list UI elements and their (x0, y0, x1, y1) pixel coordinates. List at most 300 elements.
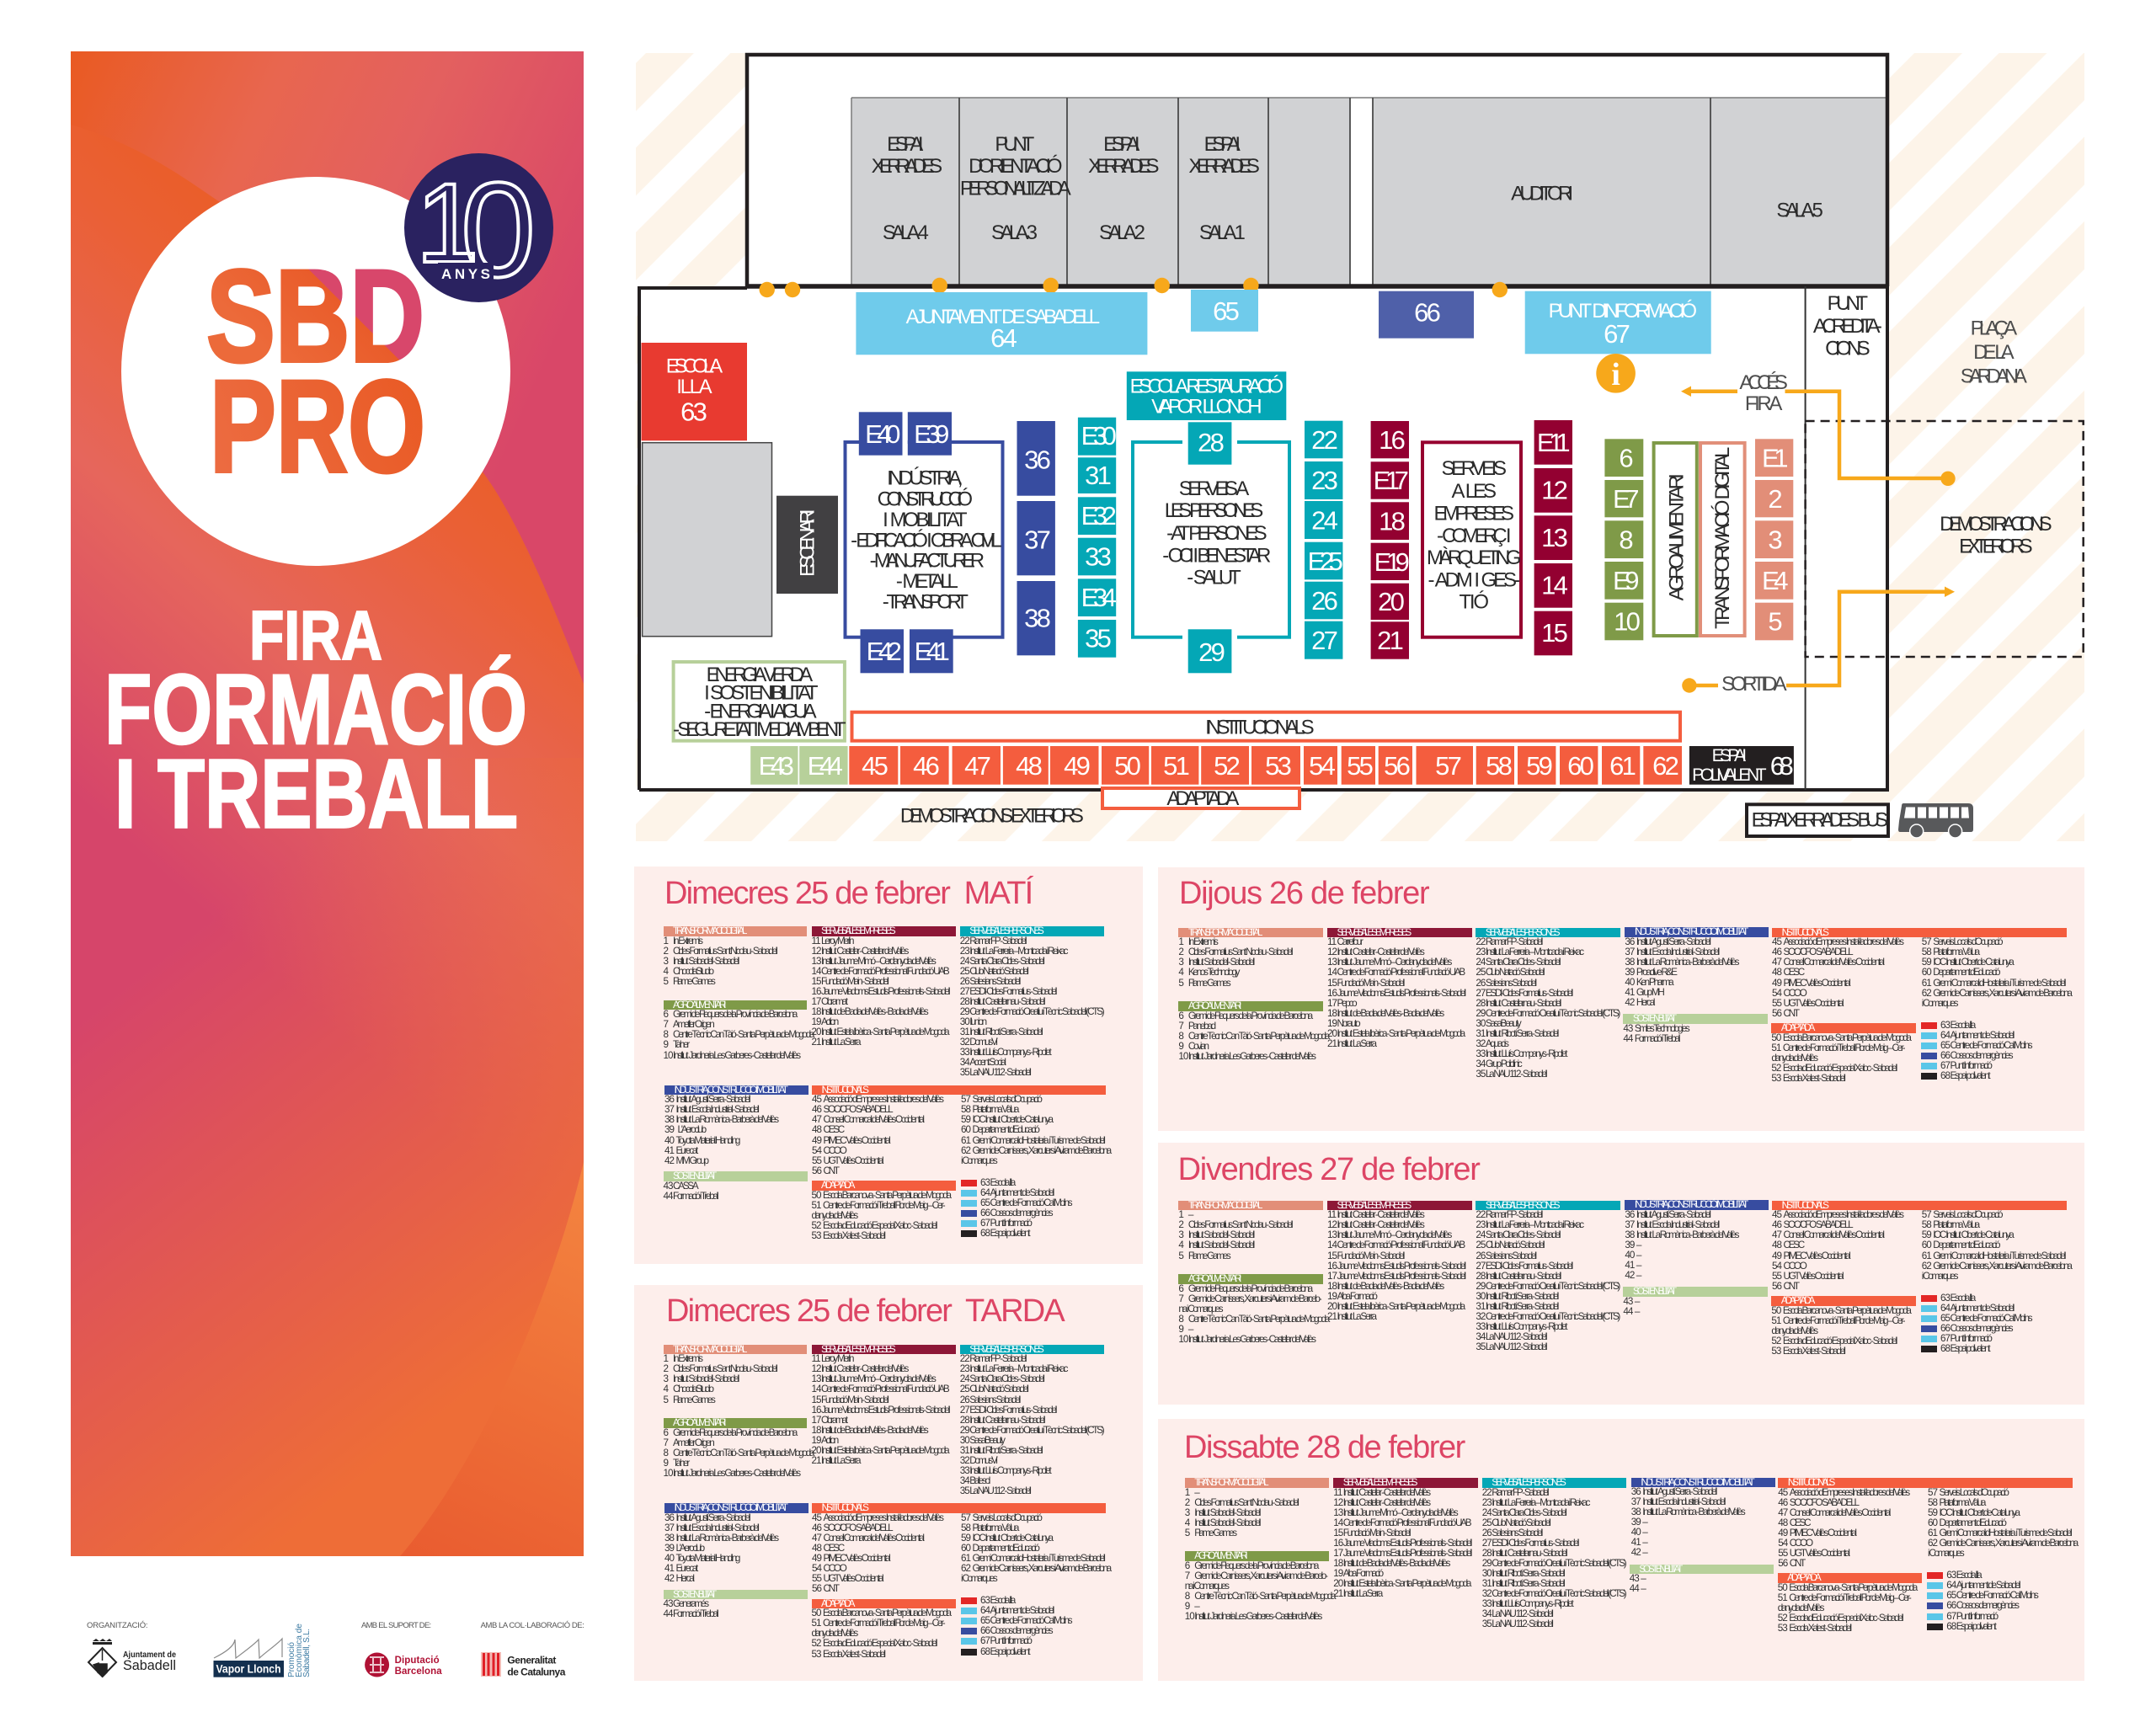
floor plan building outline (639, 53, 1887, 790)
access doors: orange dots (760, 278, 1508, 297)
list: indústria, construcció i mobilitat: Institut Agustí Serra - Sabadell (675, 1512, 749, 1523)
stands E11-15: 15 (1541, 618, 1567, 648)
list: serveis a les persones: Institut Lluís Companys - Ripollet (1486, 1048, 1566, 1059)
list: serveis a les persones: Institut Lluís Companys - Ripollet (969, 1465, 1050, 1476)
list: sostenibilitat: – (1641, 1573, 1644, 1584)
list: serveis a les persones: 27 (1476, 1261, 1485, 1272)
list: agroalimentari: Gremi de Flequers de la Província de Barcelona (1194, 1560, 1317, 1571)
list: indústria, construcció i mobilitat: 37 (1625, 946, 1634, 957)
list: institucionals: CESC (824, 1124, 843, 1135)
list: adaptada: danyola del Vallès (812, 1210, 857, 1221)
list: serveis a les persones: 25 (1476, 967, 1485, 978)
legend: espais: Centre de Formació Cal Molins (1951, 1040, 2031, 1051)
list: adaptada: ADAPTADA (821, 1598, 852, 1609)
legend: espais: Ajuntament de Sabadell (1951, 1303, 2013, 1314)
list: serveis a les empreses (1333, 1477, 1478, 1599)
stands 22-27: 26 (1311, 586, 1337, 616)
list: institucionals: Gremi de Carnissers, Xarcuters i Aviram de Barcelona (1939, 1538, 2077, 1549)
bottom row stands E43-62: E44 (808, 751, 843, 781)
list: adaptada: 51 (1778, 1592, 1787, 1603)
list: indústria, construcció i mobilitat: Institut Agustí Serra - Sabadell (1642, 1486, 1716, 1497)
list: serveis a les persones: Institut La Ferreria – Montcada i Reixac (1486, 1219, 1582, 1230)
list: institucionals: 56 (1772, 1008, 1781, 1019)
zone: serveis a les empreses: A LES (1452, 480, 1496, 503)
logo: generalitat de catalunya (481, 1621, 584, 1677)
list: institucionals: 55 (812, 1573, 821, 1584)
list: agroalimentari: AGROALIMENTARI (1194, 1550, 1245, 1561)
list: transformació digital: Institut Sabadell - Sabadell (1194, 1507, 1259, 1518)
list: serveis a les persones: 27 (960, 986, 969, 997)
legend: espais: 68 (1940, 1070, 1950, 1081)
bottom row stands E43-62: 49 (1064, 751, 1090, 781)
list: serveis a les empreses: Alba Formació (1337, 1291, 1376, 1302)
list: agroalimentari: Centre Tècnic Can Tàió - Santa Perpètua de Mogoda (1188, 1314, 1328, 1325)
list: serveis a les persones: Centre de Formació Creatiu i Tècnic Sabadell (CTS) (969, 1425, 1102, 1436)
list: serveis a les persones: Institut Castellarnau - Sabadell (969, 996, 1043, 1007)
list: transformació digital: 5 (664, 976, 668, 987)
stands E11-15 (1534, 420, 1572, 655)
label: plaça de la sardana: SARDANA (1961, 365, 2027, 387)
list: transformació digital: TRANSFORMACIÓ DIGITAL (673, 1344, 744, 1355)
list: serveis a les persones: Club Natació Sabadell (969, 1384, 1027, 1394)
list: institucionals: 49 (812, 1135, 821, 1146)
list: serveis a les persones: 33 (1476, 1048, 1485, 1059)
list: serveis a les empreses: Jaume Viladoms Estudis Professionals - Sabadell (1337, 1261, 1465, 1272)
list: institucionals: 49 (1772, 1250, 1781, 1261)
zone: indústria, construcció i mobilitat: E40 (865, 419, 900, 449)
list: serveis a les persones: 25 (1476, 1240, 1485, 1250)
list: serveis a les persones (1476, 1200, 1620, 1352)
list: institucionals: Gremi Comarcal d'Hostaleria i Turisme de Sabadell (1933, 1250, 2064, 1261)
zone: energia verda i sostenibilitat: - ENERGIA I AIGUA (704, 700, 817, 723)
list: indústria, construcció i mobilitat: 38 (664, 1114, 674, 1125)
list: transformació digital (1185, 1477, 1329, 1538)
list: indústria, construcció i mobilitat: Grup MH (1636, 987, 1663, 998)
stand 63: escola illa: ESCOLA (666, 355, 723, 377)
list: serveis a les empreses: 14 (812, 966, 821, 977)
list: agroalimentari: Institut Jardineria Les Garberes - Castellar del Vallès (1188, 1334, 1315, 1345)
list: serveis a les persones: 25 (960, 1384, 969, 1394)
list: adaptada: Escola Barcanova - Santa Perpètua de Mogoda (823, 1190, 950, 1201)
stand 68: espai polivalent (1689, 746, 1794, 785)
list: indústria, construcció i mobilitat: 36 (664, 1512, 674, 1523)
list: serveis a les empreses: 12 (812, 946, 821, 957)
list: institucionals: Serveis Locals d'Ocupació (1933, 1209, 2001, 1220)
list: serveis a les persones: 24 (960, 956, 969, 967)
badge: 10 anys: 1 (416, 161, 479, 286)
panel: dissabte 28 de febrer (1158, 1419, 2084, 1681)
legend: espais (961, 1595, 1073, 1657)
list: institucionals: 60 (1922, 967, 1931, 978)
list: serveis a les persones: Institut Ribot i Serra - Sabadell (1492, 1578, 1563, 1589)
list: indústria, construcció i mobilitat: Toyota Material Handling (675, 1553, 739, 1564)
dashed zone: demostracions exteriors (1806, 421, 2084, 657)
list: indústria, construcció i mobilitat: Hercal (675, 1573, 693, 1584)
list: institucionals: 62 (961, 1145, 970, 1156)
list: transformació digital: Institut Sabadell - Sabadell (1188, 957, 1253, 968)
stands E1-5 transformació digital: E4 (1762, 566, 1788, 595)
zone: indústria, construcció i mobilitat: INDÚSTRIA, (887, 467, 962, 490)
legend: espais: Espai polivalent (1951, 1343, 1988, 1354)
list: indústria, construcció i mobilitat: Institut Escola Industrial - Sabadell (675, 1522, 758, 1533)
list: serveis a les empreses: 18 (1327, 1008, 1337, 1019)
zone: serveis a les persones: - AT PERSONES (1166, 522, 1267, 545)
list: institucionals: 59 (1928, 1507, 1937, 1518)
arrow: sortida (1682, 586, 1955, 696)
legend: espais: Cossos d'emergències (1956, 1600, 2018, 1611)
list: institucionals: Gremi Comarcal d'Hostaleria i Turisme de Sabadell (972, 1135, 1104, 1146)
stands 16-21: 16 (1379, 425, 1405, 455)
list: agroalimentari: 8 (664, 1029, 668, 1040)
list: sostenibilitat: SOSTENIBILITAT (1633, 1013, 1674, 1024)
heading: fira formació i treball: FIRA (249, 596, 382, 675)
list: institucionals: 45 (812, 1094, 821, 1105)
list: adaptada: ADAPTADA (1781, 1295, 1812, 1306)
list: institucionals: Plataforma Vàlua (972, 1522, 1017, 1533)
list: serveis a les empreses: Pepco (1337, 998, 1355, 1009)
list: serveis a les empreses: Institut Castellar - Castellar del Vallès (1337, 946, 1423, 957)
list: transformació digital: ChocolaStudio (673, 966, 712, 977)
list: indústria, construcció i mobilitat: 40 (664, 1553, 674, 1564)
list: serveis a les persones: 31 (1476, 1028, 1485, 1039)
stand 68: espai polivalent: 68 (1770, 751, 1792, 781)
list: indústria, construcció i mobilitat: 37 (1625, 1219, 1634, 1230)
stage: escenari (776, 496, 838, 594)
legend: espais: 64 (980, 1187, 990, 1198)
rooms: sales labels: AUDITORI (1511, 182, 1572, 205)
list: sostenibilitat: 44 (664, 1191, 673, 1202)
list: serveis a les empreses: 17 (1333, 1548, 1342, 1559)
list: serveis a les persones: 27 (1476, 988, 1485, 999)
zone: serveis a les empreses (1422, 442, 1521, 637)
list: serveis a les persones: 35 (1476, 1069, 1485, 1080)
list: serveis a les persones: Institut La Ferreria – Montcada i Reixac (969, 946, 1066, 957)
list: sostenibilitat: – (1635, 1296, 1638, 1307)
list: institucionals: 55 (1772, 998, 1781, 1009)
stands 36-38: 37 (1024, 525, 1050, 555)
list: sostenibilitat: 43 (1623, 1296, 1632, 1307)
list: serveis a les persones: 25 (960, 966, 969, 977)
list: serveis a les empreses: SERVEIS A LES EMPRESES (1343, 1477, 1415, 1488)
list: sostenibilitat: Smiles Technologies (1635, 1023, 1688, 1034)
list: indústria, construcció i mobilitat: INDÚSTRIA, CONSTRUCCIÓ I MOBILITAT (1635, 1199, 1747, 1210)
list: institucionals: 47 (1772, 1229, 1781, 1240)
list: transformació digital: 3 (1185, 1507, 1189, 1518)
list: institucionals (1778, 1478, 2073, 1569)
list: institucionals: 61 (1928, 1528, 1937, 1538)
list: institucionals: CCOO (1784, 988, 1806, 999)
stands E11-15: 12 (1541, 475, 1567, 505)
list: institucionals: PIMEC Vallès Occidental (824, 1135, 889, 1146)
list: transformació digital: 1 (1178, 936, 1183, 947)
list: indústria, construcció i mobilitat: L'Aeroclub (677, 1124, 705, 1135)
list: serveis a les persones: Institut Ribot i Serra - Sabadell (969, 1445, 1041, 1456)
legend: espais: 64 (1940, 1303, 1950, 1314)
list: indústria, construcció i mobilitat: 39 (664, 1543, 674, 1554)
list: institucionals: 57 (1928, 1487, 1937, 1498)
list: agroalimentari: 9 (664, 1039, 668, 1050)
list: transformació digital: Flame Games (1188, 978, 1230, 989)
zone: indústria, construcció i mobilitat (846, 412, 1002, 673)
list: institucionals: Plataforma Vàlua (972, 1104, 1017, 1115)
legend: espais: Escola Illa (1951, 1293, 1974, 1304)
list: serveis a les empreses: 21 (1333, 1588, 1342, 1599)
list: institucionals: 57 (1922, 1209, 1931, 1220)
list: institucionals: 62 (1922, 988, 1931, 999)
list: indústria, construcció i mobilitat: 40 (1625, 977, 1634, 988)
stands 22-27: E25 (1308, 547, 1342, 576)
list: serveis a les empreses: 19 (812, 1016, 821, 1027)
list: institucionals: 47 (812, 1533, 821, 1544)
stand 63: escola illa: ILLA (676, 376, 712, 398)
legend: espais: Cossos d'emergències (990, 1208, 1051, 1218)
stands E1-5 transformació digital: 5 (1768, 606, 1781, 637)
legend: espais: 65 (980, 1615, 990, 1626)
bottom row stands E43-62: 54 (1309, 751, 1336, 781)
list: serveis a les empreses: Institut de Badia del Vallès - Badia del Vallès (1343, 1558, 1449, 1569)
zone: serveis a les empreses: SERVEIS (1442, 457, 1506, 480)
list: transformació digital (664, 925, 807, 987)
label: punt acreditacions (1813, 292, 1881, 360)
zone: transformació digital: TRANSFORMACIÓ DIGITAL (1711, 447, 1734, 629)
list: adaptada: Centre de Formació i Treball Flor de Maig – Cer- (1783, 1042, 1903, 1053)
list: transformació digital: Cicles Formatius Sant Nicolau - Sabadell (1194, 1497, 1298, 1508)
list: institucionals: Serveis Locals d'Ocupació (972, 1094, 1041, 1105)
stand 63: escola illa: 63 (680, 397, 707, 427)
list: serveis a les empreses: 15 (812, 1394, 821, 1405)
list: indústria, construcció i mobilitat: – (1636, 1260, 1640, 1271)
list: serveis a les persones (960, 925, 1104, 1078)
list: indústria, construcció i mobilitat: 38 (1625, 1229, 1634, 1240)
list: serveis a les persones: Salesians Sabadell (1486, 978, 1535, 989)
list: serveis a les empreses: Obramat (821, 996, 846, 1007)
list: serveis a les persones: 30 (960, 1016, 969, 1027)
list: agroalimentari: 9 (1178, 1041, 1183, 1052)
list: institucionals: 46 (1772, 946, 1781, 957)
logos: organització: Ajuntament de (123, 1650, 176, 1660)
list: sostenibilitat: SOSTENIBILITAT (673, 1170, 714, 1181)
legend: espais: Punt Informació (1951, 1333, 1991, 1344)
list: agroalimentari: Gremi de Carnissers, Xarcuters i Aviram de Barcelo- (1194, 1570, 1326, 1581)
legend: espais: Cossos d'emergències (1951, 1050, 2011, 1061)
list: indústria, construcció i mobilitat: 38 (1625, 957, 1634, 968)
list: serveis a les persones: DomusVi (969, 1037, 996, 1048)
list: serveis a les empreses: 13 (1327, 1229, 1337, 1240)
list: agroalimentari: Taher (673, 1458, 688, 1469)
list: sostenibilitat: SOSTENIBILITAT (673, 1589, 714, 1600)
legend: espais: 67 (980, 1218, 990, 1229)
list: serveis a les persones: 30 (960, 1435, 969, 1446)
list: serveis a les empreses: 12 (1333, 1497, 1342, 1508)
list: institucionals: 48 (812, 1124, 821, 1135)
list: institucionals: SOC/CFO SABADELL (824, 1104, 891, 1115)
list: serveis a les empreses: Centre de Formació Professional Fundació UAB (821, 966, 947, 977)
list: serveis a les empreses: 14 (1327, 1240, 1337, 1250)
list: serveis a les empreses: 13 (1327, 957, 1337, 968)
list: serveis a les empreses: Centre de Formació Professional Fundació UAB (1343, 1517, 1470, 1528)
list: transformació digital: 3 (664, 1373, 668, 1384)
list: institucionals: 61 (1922, 1250, 1931, 1261)
list: adaptada: Escola Xalest - Sabadell (823, 1230, 884, 1241)
list: adaptada: 51 (812, 1200, 821, 1211)
list: serveis a les persones: ESDI-Cicles Formatius - Sabadell (969, 1405, 1055, 1416)
list: adaptada: Escola d'Educació Especial Xaloc - Sabadell (1789, 1613, 1902, 1624)
list: serveis a les empreses: 20 (1327, 1028, 1337, 1039)
list: serveis a les empreses (1327, 1200, 1472, 1322)
list: adaptada: 50 (1778, 1582, 1787, 1593)
list: institucionals: 55 (1772, 1271, 1781, 1282)
list: agroalimentari: 7 (664, 1437, 668, 1448)
heading: fira formació i treball: I TREBALL (115, 739, 518, 849)
list: adaptada: 51 (1771, 1315, 1780, 1326)
list: institucionals: 58 (1928, 1497, 1937, 1508)
list: transformació digital: Institut Sabadell - Sabadell (673, 1373, 738, 1384)
list: transformació digital: ChocolaStudio (673, 1384, 712, 1394)
list: serveis a les persones: Ramar FP - Sabadell (969, 936, 1025, 946)
label: plaça de la sardana: DE LA (1973, 341, 2015, 364)
list: indústria, construcció i mobilitat: Ken Pharma (1636, 977, 1672, 988)
list: serveis a les persones: 26 (960, 1394, 969, 1405)
bottom row stands E43-62: 59 (1526, 751, 1552, 781)
logo: diputació barcelona: Barcelona (395, 1666, 442, 1677)
stand 67: punt d'informació: 67 (1604, 319, 1630, 349)
logo: generalitat de catalunya: AMB LA COL·LABORACIÓ DE: (481, 1621, 584, 1630)
list: agroalimentari: 10 (664, 1468, 673, 1479)
list: serveis a les empreses: 16 (1333, 1538, 1342, 1549)
list: serveis a les empreses: Fundació Main - Sabadell (821, 976, 888, 987)
list: institucionals: Consell Comarcal del Vallès Occidental (1790, 1507, 1889, 1518)
list: institucionals: 48 (1778, 1517, 1787, 1528)
list: serveis a les empreses: 11 (1327, 1209, 1336, 1220)
list: serveis a les persones: Centre de Formació Creatiu i Tècnic Sabadell (CTS) (1492, 1588, 1625, 1599)
legend: espais: 65 (1940, 1313, 1950, 1324)
rooms: sales labels: D'ORIENTACIÓ (969, 155, 1062, 178)
logo: diputació barcelona: Diputació (395, 1656, 440, 1666)
list: adaptada: Escola d'Educació Especial Xaloc - Sabadell (1783, 1336, 1896, 1346)
list: transformació digital: Cicles Formatius Sant Nicolau - Sabadell (673, 946, 776, 957)
list: indústria, construcció i mobilitat: – (1642, 1537, 1646, 1548)
zone: energia verda i sostenibilitat: I SOSTENIBILITAT (704, 682, 819, 704)
list: institucionals: INSTITUCIONALS (822, 1502, 867, 1513)
list: serveis a les empreses: Institut La Serra (1343, 1588, 1381, 1599)
list: serveis a les persones: 23 (1476, 1219, 1485, 1230)
list: institucionals: 61 (961, 1553, 970, 1564)
list: adaptada: ADAPTADA (1787, 1572, 1819, 1583)
list: institucionals: Gremi de Carnissers, Xarcuters i Aviram de Barcelona (972, 1563, 1110, 1574)
list: transformació digital: TRANSFORMACIÓ DIGITAL (1188, 1200, 1260, 1211)
list: transformació digital: In Extremis (673, 936, 702, 946)
list: serveis a les persones: SERVEIS A LES PERSONES (969, 925, 1042, 936)
list: serveis a les persones: 24 (1476, 957, 1485, 968)
zone: serveis a les empreses: - ADM I GES- (1428, 569, 1519, 592)
legend: espais: 68 (980, 1228, 990, 1239)
rooms: sales labels: SALA 5 (1776, 199, 1823, 222)
list: adaptada (1771, 1022, 1916, 1084)
list: serveis a les persones: 29 (960, 1006, 969, 1017)
logo: vapor llonch: Vapor Llonch (216, 1662, 281, 1676)
list: institucionals: 59 (961, 1533, 970, 1544)
list: indústria, construcció i mobilitat: 42 (664, 1155, 674, 1166)
list: transformació digital: – (1188, 1209, 1192, 1220)
list: serveis a les persones: 29 (960, 1425, 969, 1436)
list: indústria, construcció i mobilitat (664, 1085, 808, 1166)
list: serveis a les empreses: Institut Jaume Mimó – Cerdanyola del Vallès (821, 1373, 935, 1384)
list: institucionals: Consell Comarcal del Vallès Occidental (1784, 957, 1883, 968)
list: serveis a les persones: Institut Castellarnau - Sabadell (1492, 1548, 1566, 1559)
list: indústria, construcció i mobilitat: INDÚSTRIA, CONSTRUCCIÓ I MOBILITAT (1635, 926, 1747, 937)
list: serveis a les persones: Centre de Formació Creatiu i Tècnic Sabadell (CTS) (1486, 1311, 1619, 1322)
list: institucionals: 62 (1922, 1261, 1931, 1272)
list: institucionals: Associació d'Empreses Instal·ladores del Vallès (1790, 1487, 1908, 1498)
list: serveis a les empreses: 14 (1333, 1517, 1342, 1528)
bottom row stands E43-62: 51 (1163, 751, 1189, 781)
list: agroalimentari: Gremi de Flequers de la Província de Barcelona (1188, 1283, 1311, 1294)
list: serveis a les persones: 24 (960, 1373, 969, 1384)
list: serveis a les persones: 31 (960, 1026, 969, 1037)
list: serveis a les empreses: Norauto (1337, 1018, 1358, 1029)
list: adaptada: 50 (812, 1190, 821, 1201)
list: serveis a les empreses: SERVEIS A LES EMPRESES (1337, 1200, 1409, 1211)
list: institucionals: UGT Vallès Occidental (824, 1155, 882, 1166)
stand 67: punt d'informació (1525, 291, 1711, 354)
panel: divendres 27 de febrer (1158, 1143, 2084, 1405)
badge: 10 anys: 0 (461, 154, 536, 305)
list: serveis a les empreses: 19 (1333, 1568, 1342, 1579)
list: transformació digital: Flame Games (673, 976, 714, 987)
stands E1-5 transformació digital: 2 (1768, 484, 1781, 514)
list: serveis a les empreses: Institut Castellar - Castellar del Vallès (821, 1363, 907, 1374)
list: serveis a les empreses: Institut La Serra (821, 1037, 859, 1048)
list: serveis a les persones: 27 (960, 1405, 969, 1416)
list: serveis a les persones: 24 (1476, 1229, 1485, 1240)
list: sostenibilitat (664, 1170, 808, 1202)
zone: energia verda i sostenibilitat: - SEGURETAT I MEDI AMBIENT (673, 718, 846, 741)
list: indústria, construcció i mobilitat: 38 (1631, 1506, 1641, 1517)
list: serveis a les empreses: Jaume Viladoms Estudis Professionals - Sabadell (1343, 1538, 1470, 1549)
icon: bus (1898, 803, 1973, 838)
list: agroalimentari (664, 1000, 815, 1061)
list: indústria, construcció i mobilitat: Eurecat (675, 1145, 696, 1156)
list: institucionals: Gremi Comarcal d'Hostaleria i Turisme de Sabadell (1939, 1528, 2071, 1538)
list: institucionals: 59 (1922, 1229, 1931, 1240)
list: institucionals: 56 (812, 1583, 821, 1594)
list: indústria, construcció i mobilitat: – (1642, 1517, 1646, 1528)
list: serveis a les persones: 22 (960, 936, 969, 946)
stands 6-10 agroalimentari: 8 (1619, 525, 1632, 554)
list: serveis a les persones: Institut La Ferreria – Montcada i Reixac (969, 1363, 1066, 1374)
rooms: sales labels: PERSONALITZADA (960, 177, 1071, 200)
list: indústria, construcció i mobilitat: 39 (1631, 1517, 1641, 1528)
list: serveis a les empreses: 17 (1327, 998, 1337, 1009)
bottom row stands E43-62: 60 (1567, 751, 1594, 781)
logo: diputació barcelona: AMB EL SUPORT DE: (361, 1621, 431, 1630)
list: adaptada: 52 (812, 1638, 821, 1649)
list: serveis a les persones: 26 (1482, 1528, 1492, 1538)
list: serveis a les empreses: 20 (812, 1445, 821, 1456)
list: indústria, construcció i mobilitat: INDÚSTRIA, CONSTRUCCIÓ I MOBILITAT (674, 1502, 786, 1513)
list: institucionals: Gremi de Carnissers, Xarcuters i Aviram de Barcelona (1933, 988, 2071, 999)
list: sostenibilitat: 43 (1623, 1023, 1632, 1034)
legend: espais: 64 (980, 1605, 990, 1616)
list: indústria, construcció i mobilitat: Institut La Romànica - Barberà del Vallès (1642, 1506, 1743, 1517)
list: transformació digital: 4 (664, 1384, 668, 1394)
list: indústria, construcció i mobilitat: 40 (664, 1135, 674, 1146)
list: institucionals: Plataforma Vàlua (1939, 1497, 1984, 1508)
list: serveis a les persones: 33 (960, 1465, 969, 1476)
list: serveis a les empreses: 17 (812, 996, 821, 1007)
list: adaptada: 52 (1778, 1613, 1787, 1624)
list: serveis a les persones: 27 (1482, 1538, 1492, 1549)
